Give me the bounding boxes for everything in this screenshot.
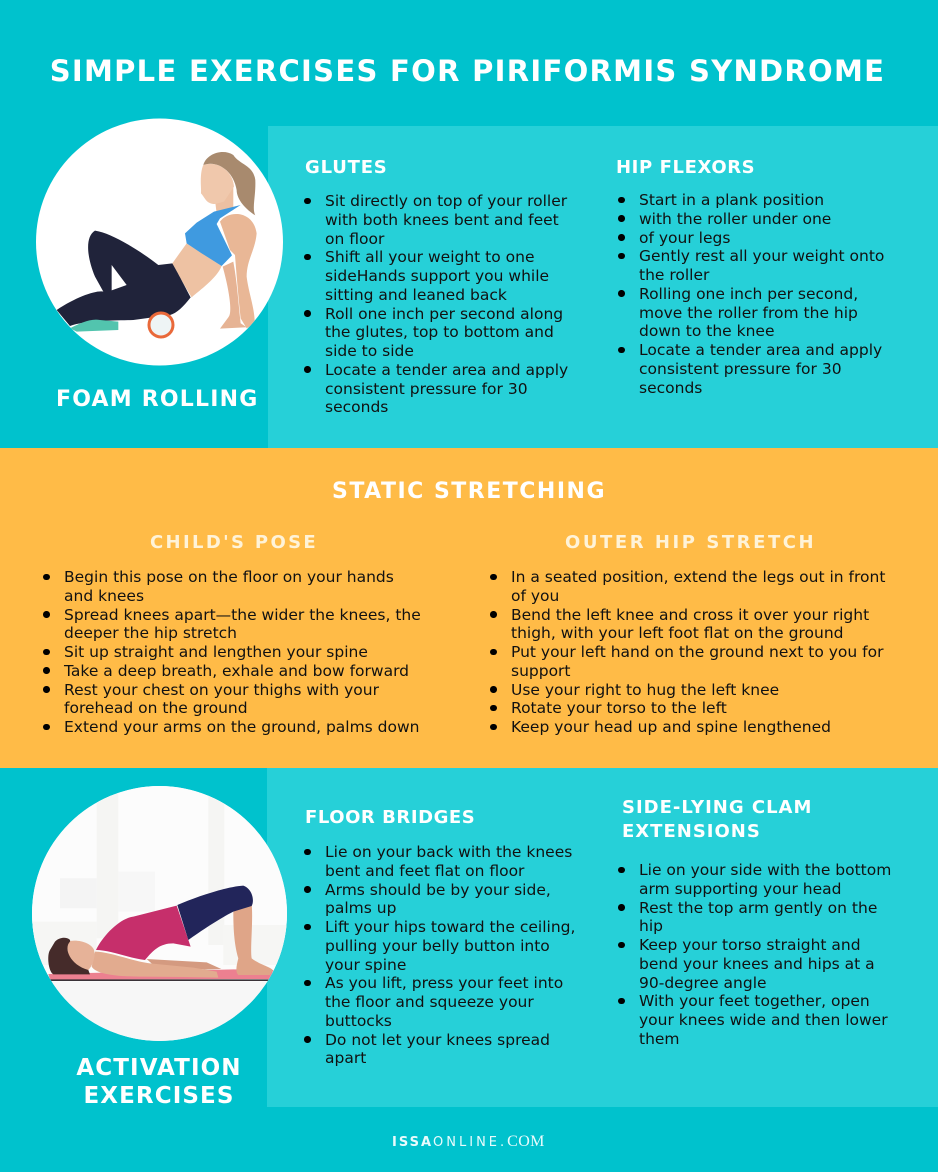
text block: floor bridges steps: apart bbox=[325, 1049, 366, 1067]
text block: glutes steps: consistent pressure for 30 bbox=[325, 380, 528, 398]
text block: floor bridges steps: Do not let your knees spread bbox=[325, 1030, 550, 1048]
heading: hip flexors: HIP FLEXORS bbox=[616, 157, 755, 178]
text block: floor bridges steps bbox=[304, 843, 575, 1067]
text block: child's pose steps: forehead on the ground bbox=[64, 699, 248, 717]
text block: outer hip stretch steps: thigh, with your left foot flat on the ground bbox=[511, 624, 843, 642]
text block: hip flexors steps: the roller bbox=[639, 266, 709, 284]
text block: hip flexors steps: move the roller from the hip bbox=[639, 304, 858, 322]
text block: glutes steps: Roll one inch per second along bbox=[325, 304, 563, 322]
text block: floor bridges steps: bent and feet flat on floor bbox=[325, 862, 524, 880]
text block: hip flexors steps: Start in a plank position bbox=[639, 191, 824, 209]
text block: clam extension steps: arm supporting your head bbox=[639, 880, 842, 898]
heading: side-lying clam extensions: SIDE-LYING CLAM bbox=[622, 797, 812, 818]
text block: clam extension steps: hip bbox=[639, 917, 663, 935]
icon: foam rolling photo bbox=[36, 118, 283, 366]
text block: glutes steps: the glutes, top to bottom and bbox=[325, 323, 554, 341]
text block: child's pose steps: Spread knees apart—the wider the knees, the bbox=[64, 606, 421, 624]
text block: clam extension steps bbox=[618, 861, 891, 1048]
text block: glutes steps bbox=[304, 192, 568, 416]
text block: floor bridges steps: Arms should be by your side, bbox=[325, 880, 551, 898]
heading: static stretching: STATIC STRETCHING bbox=[332, 479, 606, 504]
text block: floor bridges steps: the floor and squeeze your bbox=[325, 993, 534, 1011]
text block: clam extension steps: With your feet together, open bbox=[639, 992, 870, 1010]
heading: outer hip stretch: OUTER HIP STRETCH bbox=[565, 532, 816, 553]
title: SIMPLE EXERCISES FOR PIRIFORMIS SYNDROME bbox=[50, 54, 885, 88]
text block: clam extension steps: Rest the top arm gently on the bbox=[639, 898, 877, 916]
text block: hip flexors steps: down to the knee bbox=[639, 322, 774, 340]
text block: glutes steps: on floor bbox=[325, 230, 384, 248]
text block: floor bridges steps: Lie on your back with the knees bbox=[325, 843, 572, 861]
text block: floor bridges steps: buttocks bbox=[325, 1012, 392, 1030]
text block: hip flexors steps: Locate a tender area and apply bbox=[639, 341, 882, 359]
text block: floor bridges steps: As you lift, press your feet into bbox=[325, 974, 563, 992]
text block: floor bridges steps: palms up bbox=[325, 899, 396, 917]
text block: clam extension steps: Keep your torso straight and bbox=[639, 936, 861, 954]
heading: side-lying clam extensions: EXTENSIONS bbox=[622, 820, 761, 842]
text block: outer hip stretch steps: Keep your head up and spine lengthened bbox=[511, 718, 831, 736]
text block: clam extension steps: Lie on your side with the bottom bbox=[639, 861, 891, 879]
text block: floor bridges steps: your spine bbox=[325, 956, 406, 974]
text block: outer hip stretch steps: Use your right to hug the left knee bbox=[511, 680, 779, 698]
heading: side-lying clam extensions bbox=[622, 797, 812, 842]
text block: glutes steps: Shift all your weight to one bbox=[325, 248, 534, 266]
text block: child's pose steps: Begin this pose on the floor on your hands bbox=[64, 568, 394, 586]
text block: glutes steps: Locate a tender area and apply bbox=[325, 361, 568, 379]
panel: activation exercises background bbox=[267, 768, 938, 1107]
heading: glutes: GLUTES bbox=[305, 157, 388, 178]
text block: clam extension steps: your knees wide and then lower bbox=[639, 1011, 888, 1029]
text block: hip flexors steps: seconds bbox=[639, 378, 702, 396]
text block: outer hip stretch steps: Bend the left knee and cross it over your right bbox=[511, 606, 869, 624]
panel: static stretching background bbox=[0, 448, 938, 768]
text block: child's pose steps: Take a deep breath, exhale and bow forward bbox=[64, 662, 409, 680]
text block: hip flexors steps: of your legs bbox=[639, 228, 730, 246]
footer: website: ISSAONLINE.COM bbox=[392, 1133, 545, 1150]
text block: clam extension steps: bend your knees and hips at a bbox=[639, 955, 875, 973]
text block: glutes steps: with both knees bent and feet bbox=[325, 211, 559, 229]
text block: child's pose steps: and knees bbox=[64, 587, 144, 605]
icon: floor bridge photo bbox=[32, 786, 287, 1041]
panel: foam rolling background bbox=[268, 126, 938, 448]
text block: child's pose steps bbox=[43, 568, 421, 736]
text block: glutes steps: side to side bbox=[325, 342, 414, 360]
text block: hip flexors steps: consistent pressure for 30 bbox=[639, 360, 842, 378]
text block: outer hip stretch steps: support bbox=[511, 662, 571, 680]
text block: hip flexors steps bbox=[618, 191, 884, 396]
text block: floor bridges steps: pulling your belly button into bbox=[325, 937, 550, 955]
heading: foam rolling: FOAM ROLLING bbox=[56, 387, 258, 412]
text block: outer hip stretch steps: Put your left hand on the ground next to you for bbox=[511, 643, 883, 661]
heading: activation exercises: ACTIVATION bbox=[76, 1054, 242, 1080]
text block: outer hip stretch steps: In a seated position, extend the legs out in front bbox=[511, 568, 885, 586]
heading: activation exercises bbox=[76, 1054, 242, 1109]
heading: child's pose: CHILD'S POSE bbox=[150, 532, 318, 553]
text block: hip flexors steps: Rolling one inch per second, bbox=[639, 285, 858, 303]
text block: child's pose steps: Rest your chest on your thighs with your bbox=[64, 680, 379, 698]
text block: glutes steps: seconds bbox=[325, 398, 388, 416]
text block: floor bridges steps: Lift your hips toward the ceiling, bbox=[325, 918, 575, 936]
text block: clam extension steps: 90-degree angle bbox=[639, 974, 767, 992]
text block: child's pose steps: Sit up straight and lengthen your spine bbox=[64, 643, 368, 661]
text block: hip flexors steps: Gently rest all your weight onto bbox=[639, 247, 884, 265]
text block: outer hip stretch steps: Rotate your torso to the left bbox=[511, 699, 727, 717]
text block: hip flexors steps: with the roller under one bbox=[639, 210, 831, 228]
heading: floor bridges: FLOOR BRIDGES bbox=[305, 807, 475, 828]
text block: child's pose steps: Extend your arms on the ground, palms down bbox=[64, 718, 420, 736]
heading: activation exercises: EXERCISES bbox=[83, 1083, 235, 1109]
text block: glutes steps: sitting and leaned back bbox=[325, 286, 507, 304]
text block: clam extension steps: them bbox=[639, 1030, 680, 1048]
text block: outer hip stretch steps: of you bbox=[511, 587, 559, 605]
text block: child's pose steps: deeper the hip stretch bbox=[64, 624, 237, 642]
text block: outer hip stretch steps bbox=[490, 568, 886, 736]
text block: glutes steps: sideHands support you while bbox=[325, 267, 549, 285]
text block: glutes steps: Sit directly on top of your roller bbox=[325, 192, 567, 210]
